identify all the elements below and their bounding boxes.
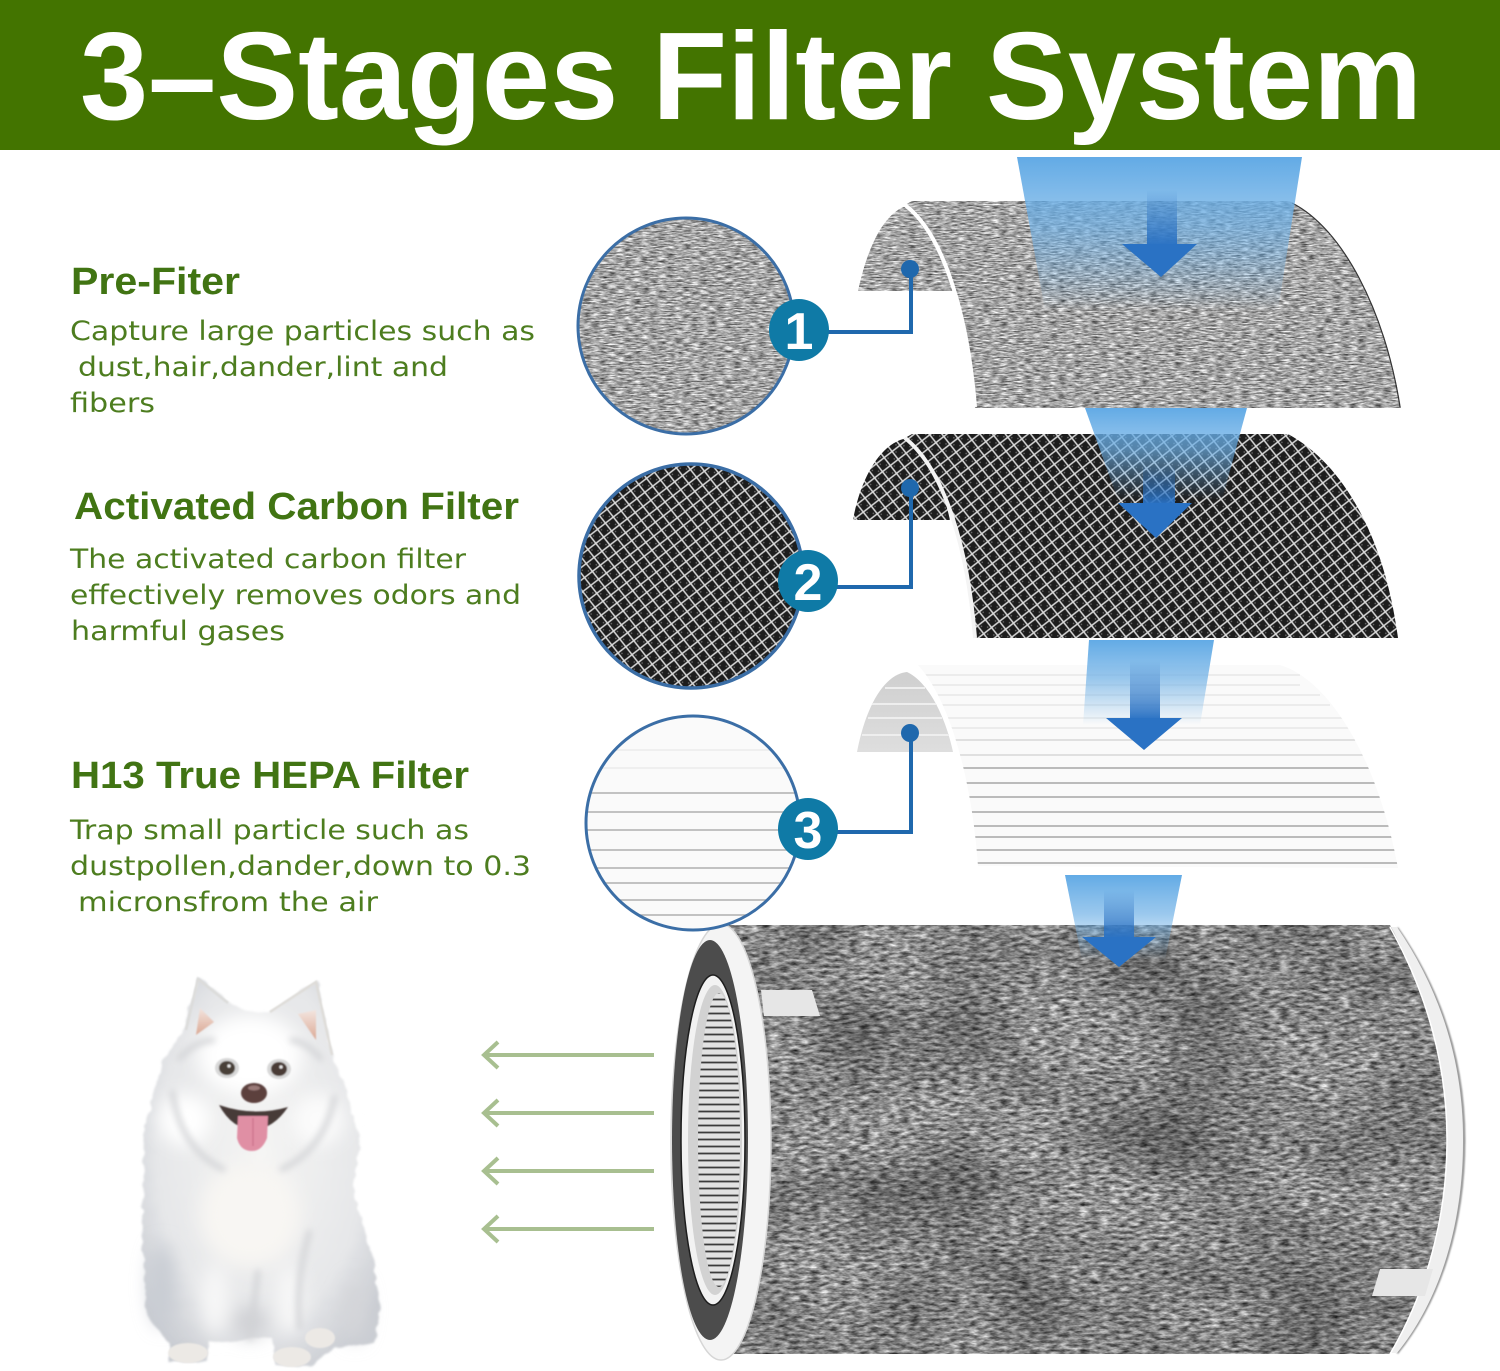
description: HEPA: dustpollen,dander,down to 0.3 — [70, 851, 531, 882]
title banner — [0, 0, 1500, 150]
HEPA pleats — [698, 993, 740, 1287]
callout 1 — [769, 260, 919, 361]
end rim shadow — [1397, 928, 1464, 1353]
zoom circle 2: carbon mesh texture — [579, 464, 803, 688]
nose — [241, 1083, 267, 1103]
description: HEPA — [69, 815, 531, 918]
tongue — [237, 1116, 268, 1151]
filter sheet 1: pre-filter — [858, 201, 1401, 408]
filter sheet 2: activated carbon mesh — [853, 434, 1398, 638]
text block: activated carbon filter — [69, 486, 521, 647]
description: pre-filter: Capture large particles such as — [70, 316, 535, 347]
cylinder body — [725, 925, 1447, 1354]
callout 2 — [778, 479, 919, 612]
paws — [168, 1343, 208, 1363]
description: pre-filter: dust,hair,dander,lint and — [78, 352, 448, 383]
heading: pre-filter: Pre-Fiter — [71, 261, 240, 303]
air flow beam 4 with arrow — [1065, 875, 1182, 967]
heading: HEPA: H13 True HEPA Filter — [71, 755, 469, 797]
description: activated carbon: harmful gases — [71, 616, 285, 647]
description: pre-filter: fibers — [70, 388, 155, 419]
inner white ring — [681, 975, 745, 1305]
dark carbon ring — [672, 940, 748, 1340]
description: HEPA: micronsfrom the air — [78, 887, 379, 918]
heading: activated carbon: Activated Carbon Filter — [74, 486, 519, 528]
arrows: clean air outflow — [484, 1042, 654, 1242]
text block: pre-filter — [70, 261, 535, 419]
title text: 3–Stages Filter System — [80, 8, 1422, 146]
icon: white dog — [142, 977, 380, 1367]
description: activated carbon: effectively removes odors and — [70, 580, 521, 611]
description: pre-filter — [70, 316, 535, 419]
filter sheet 3: HEPA pleats — [857, 665, 1398, 868]
eye rims — [215, 1058, 239, 1078]
description: activated carbon — [69, 544, 521, 647]
end rim — [1385, 927, 1463, 1353]
cylinder filter — [671, 924, 1464, 1360]
air flow beam 3 with arrow — [1083, 640, 1214, 750]
tape top — [761, 990, 820, 1016]
callout 2: 2 — [794, 554, 822, 612]
front white rim — [671, 924, 771, 1360]
callout 1: 1 — [785, 303, 813, 361]
mouth — [219, 1105, 288, 1130]
zoom circle 1: pre-filter texture — [578, 218, 794, 434]
text block: H13 HEPA filter — [69, 755, 531, 918]
tape bottom — [1372, 1269, 1433, 1296]
air flow beam 2 with arrow — [1085, 408, 1247, 538]
air flow beam 1 with arrow — [1017, 157, 1302, 310]
description: activated carbon: The activated carbon filter — [69, 544, 467, 575]
inner grey wall — [688, 985, 742, 1295]
rim inner highlight — [1390, 927, 1447, 1354]
callout 3 — [778, 724, 919, 860]
ears — [196, 1008, 214, 1035]
description: HEPA: Trap small particle such as — [69, 815, 469, 846]
callout 3: 3 — [794, 802, 822, 860]
zoom circle 3: HEPA pleats texture — [580, 716, 810, 930]
eyes — [219, 1061, 235, 1075]
